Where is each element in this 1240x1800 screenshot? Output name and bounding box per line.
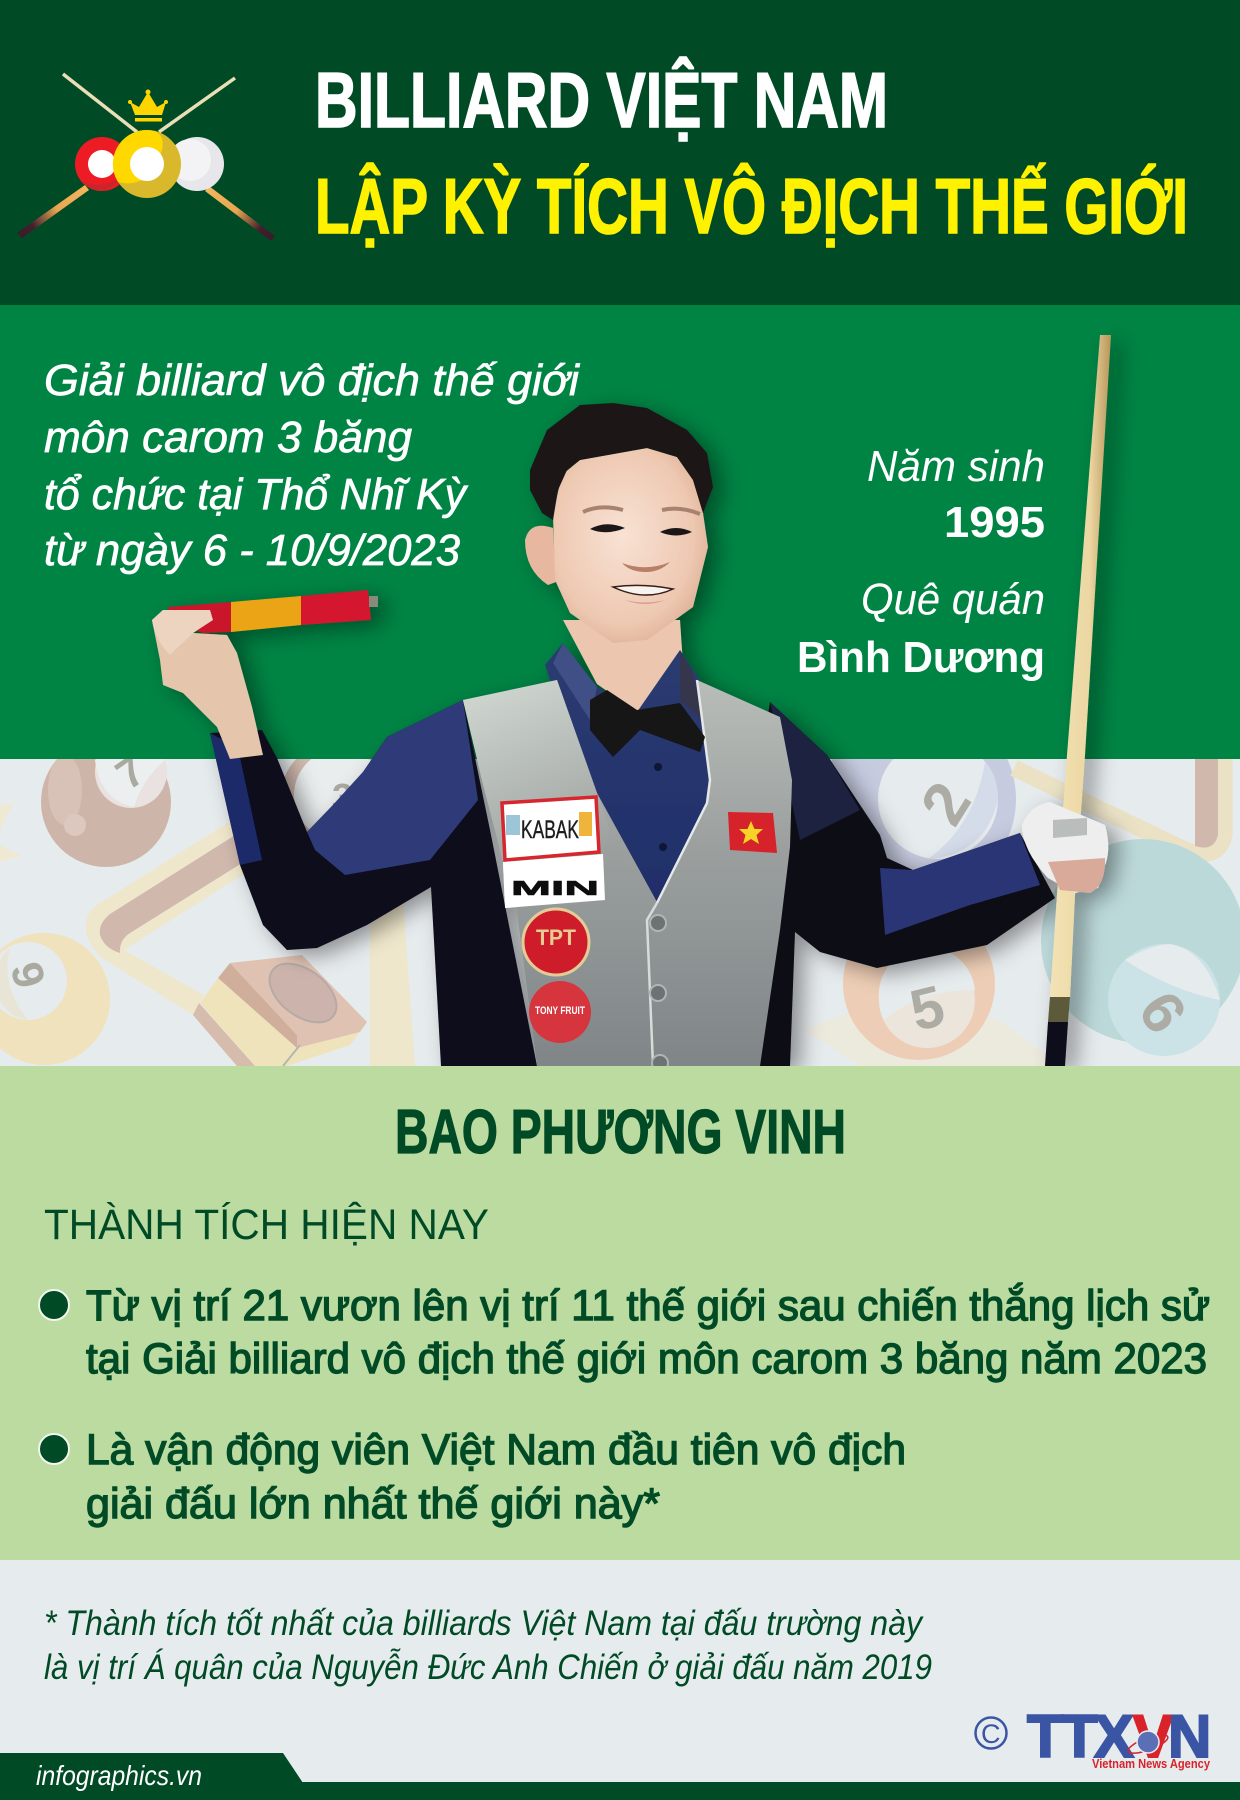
badge: KABAK sponsor: KABAK	[521, 816, 579, 844]
body: raised hand	[152, 610, 263, 759]
left pale spikes	[0, 803, 14, 830]
icon: cue tube held in hand	[152, 590, 378, 655]
copyright symbol: C	[981, 1719, 1000, 1749]
intro text block: từ ngày 6 - 10/9/2023	[44, 526, 461, 575]
title line 1: BILLIARD VIỆT NAM	[315, 56, 888, 144]
ball 7: 7	[107, 746, 153, 798]
ball 7	[41, 759, 171, 867]
badge: MIN sponsor: MIN	[511, 878, 599, 900]
ball 6	[1041, 839, 1240, 1056]
body: neck	[563, 620, 684, 712]
body: glove and hand	[1022, 802, 1108, 893]
badge: red TPT: TPT	[536, 925, 577, 950]
illustration: player portrait	[152, 335, 1111, 1071]
icon: crossed cues with balls and crown	[17, 74, 275, 241]
panel: footnote	[0, 1560, 1240, 1800]
logo: TTXVN: TTXVN	[1027, 1703, 1211, 1770]
player facts text block: Năm sinh	[867, 442, 1045, 491]
player facts text block: 1995	[944, 498, 1045, 547]
player name heading: BAO PHƯƠNG VINH	[395, 1098, 846, 1167]
player facts text block	[797, 442, 1045, 682]
bullet 2: Là vận động viên Việt Nam đầu tiên vô địch	[86, 1426, 906, 1474]
ball 2: 2	[908, 771, 985, 837]
intro text block: tổ chức tại Thổ Nhĩ Kỳ	[44, 470, 469, 519]
ball 9	[0, 933, 110, 1065]
footer bar	[0, 1753, 1240, 1800]
badge: Tony Fruit	[529, 981, 591, 1043]
triangle rack right	[1014, 759, 1224, 854]
bullet 1	[39, 1282, 1210, 1383]
ball 6: 6	[1126, 979, 1200, 1045]
footnote text	[44, 1604, 932, 1687]
bullet 2: giải đấu lớn nhất thế giới này*	[86, 1480, 660, 1528]
footer site name: infographics.vn	[36, 1760, 202, 1791]
ball 3	[284, 759, 372, 832]
bullet 1: tại Giải billiard vô địch thế giới môn carom 3 băng năm 2023	[86, 1335, 1207, 1383]
ball 3: 3	[332, 777, 353, 819]
pale background triangles	[806, 1012, 1046, 1066]
ball 9: 9	[1, 957, 54, 993]
ball 5: 5	[904, 973, 951, 1044]
icon: Vietnam flag patch	[728, 812, 777, 853]
body: shirt	[545, 643, 716, 908]
chalk cube	[193, 952, 367, 1066]
intro text block	[44, 356, 580, 575]
bullet 1: Từ vị trí 21 vươn lên vị trí 11 thế giới sau chiến thắng lịch sử	[86, 1282, 1210, 1330]
panel: billiard pattern background	[0, 759, 1240, 1066]
badge: red TPT	[523, 909, 589, 975]
body: raised left arm	[210, 700, 537, 1066]
footnote text: * Thành tích tốt nhất của billiards Việt Nam tại đấu trường này	[44, 1604, 924, 1643]
panel: green hero background	[0, 305, 1240, 759]
body: head	[525, 403, 713, 643]
badge: MIN sponsor	[503, 854, 605, 908]
footnote text: là vị trí Á quân của Nguyễn Đức Anh Chiến ở giải đấu năm 2019	[44, 1648, 932, 1687]
icon: bow tie	[590, 690, 705, 757]
logo: TTXVN: Vietnam News Agency	[1092, 1756, 1211, 1771]
body: grey vest	[463, 680, 792, 1066]
ball 2	[832, 759, 1016, 870]
ball 5	[843, 946, 995, 1060]
icon: billiard cue	[1045, 335, 1111, 1066]
player facts text block: Bình Dương	[797, 633, 1045, 682]
achievements heading: THÀNH TÍCH HIỆN NAY	[44, 1201, 489, 1249]
panel: header	[0, 0, 1240, 305]
triangle rack left	[86, 815, 415, 1066]
body: right arm	[740, 702, 1055, 1066]
intro text block: môn carom 3 băng	[44, 413, 413, 462]
badge: Tony Fruit: TONY FRUIT	[535, 1005, 585, 1017]
copyright symbol	[976, 1718, 1006, 1749]
vest and shirt buttons	[650, 763, 668, 1071]
player facts text block: Quê quán	[861, 575, 1045, 624]
intro text block: Giải billiard vô địch thế giới	[44, 356, 580, 405]
bullet 2	[39, 1426, 906, 1528]
panel: achievements	[0, 1066, 1240, 1560]
badge: KABAK sponsor	[502, 797, 599, 860]
